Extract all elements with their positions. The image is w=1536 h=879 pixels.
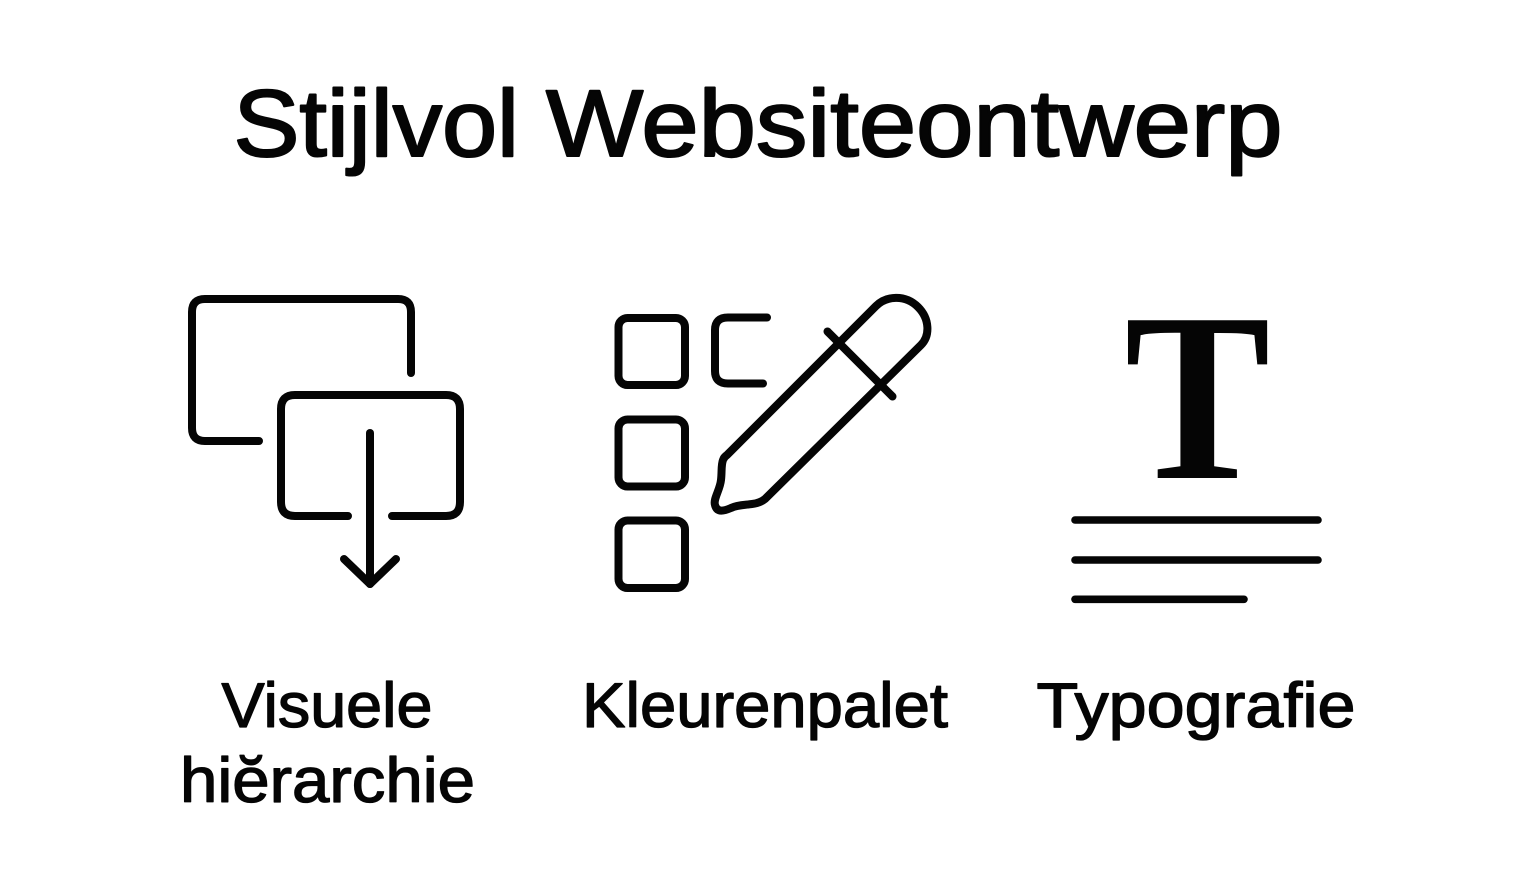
label: visual hierarchy: Visuele [222, 671, 432, 741]
label: visual hierarchy [180, 671, 475, 816]
title: Websiteontwerp [546, 71, 1282, 177]
serif letter T: T [1125, 263, 1270, 530]
label: colour palette: Kleurenpalet [582, 671, 949, 741]
icon: visual hierarchy [192, 299, 460, 584]
label: typography: Typografie [1036, 671, 1356, 741]
text lines [1075, 520, 1318, 599]
icon: colour palette [618, 298, 927, 588]
title [234, 71, 1282, 177]
label: visual hierarchy: hiĕrarchie [180, 746, 475, 816]
title: Stijlvol [234, 71, 519, 177]
